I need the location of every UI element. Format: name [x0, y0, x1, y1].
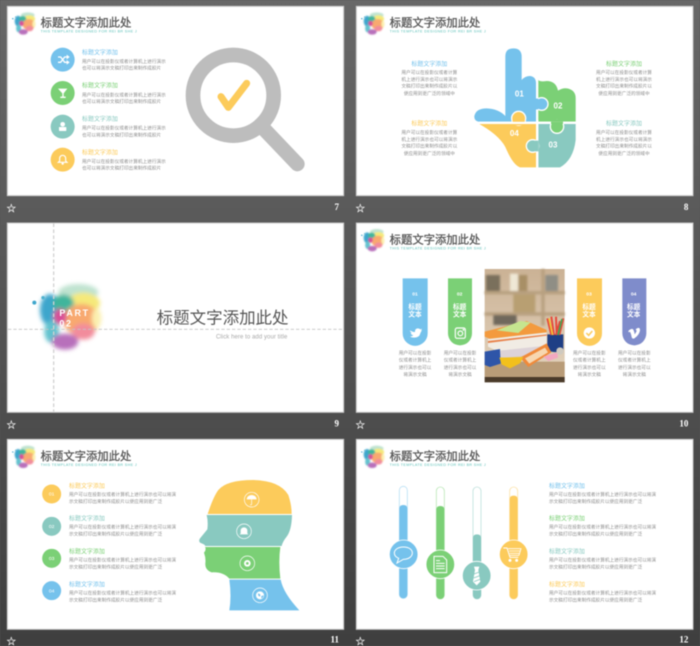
slide 8 logo	[361, 12, 385, 35]
text row 2: 标题文字添加	[549, 515, 585, 523]
tab 03: 03	[586, 291, 592, 297]
text block 4: 标题文字添加	[411, 120, 447, 128]
slide 12 logo	[361, 446, 385, 468]
text block 2: 便应用到更广泛的领域中	[598, 90, 650, 97]
slide 7 title: 标题文字添加此处	[41, 16, 131, 30]
tab 01: 将演示文稿	[403, 371, 427, 378]
page number 10: 10	[679, 418, 689, 428]
text block 2: 用户可以在投影仪或者计算	[596, 69, 652, 76]
page number 8: 8	[684, 202, 689, 212]
text block 3: 机上进行演示也可以将演示	[596, 136, 652, 143]
tab 01: 标题	[408, 302, 422, 311]
slider 4: cart	[499, 487, 528, 599]
item 4: 也可以将演示文稿打印出来制作成胶片	[82, 165, 162, 172]
item 2: 用户可以在投影仪或者计算机上进行演示	[82, 91, 166, 98]
tab 01: 文本	[408, 309, 422, 318]
item 1	[51, 48, 166, 72]
row 03: 示文稿打印出来制作成胶片以便应用到更广泛	[69, 563, 162, 570]
part label	[59, 308, 90, 329]
slider 1: speech	[389, 486, 418, 598]
text block 4: 文稿打印出来制作成胶片以	[401, 143, 458, 150]
slide 11 subtitle: THIS TEMPLATE DESIGNED FOR REI BR SHE J	[41, 463, 137, 467]
item 2: 也可以将演示文稿打印出来制作成胶片	[82, 98, 162, 105]
tab 01: 进行演示也可以	[399, 364, 432, 371]
slide 9 star mark: ☆	[7, 420, 16, 430]
tab 04: 文本	[627, 309, 641, 318]
text row 1: 示文稿打印出来制作成胶片以便应用到更广泛	[549, 498, 642, 505]
slide 10 logo	[361, 229, 385, 251]
slide 11 title: 标题文字添加此处	[41, 449, 131, 463]
tab 01	[399, 278, 432, 378]
row 01	[42, 482, 176, 505]
text row 3: 标题文字添加	[549, 547, 585, 555]
row 04: 示文稿打印出来制作成胶片以便应用到更广泛	[69, 596, 162, 603]
text row 4: 标题文字添加	[549, 580, 585, 588]
row 03	[42, 547, 176, 570]
slide 8 sheet	[356, 6, 693, 196]
page number 9: 9	[334, 418, 339, 428]
puzzle hand chart: 03	[549, 140, 558, 149]
text block 1: 文稿打印出来制作成胶片以	[401, 83, 458, 90]
slide 11 logo	[12, 446, 36, 468]
slide 10 subtitle: THIS TEMPLATE DESIGNED FOR REI BR SHE J	[390, 246, 486, 250]
row 03: 03	[49, 556, 55, 562]
slide 7 logo	[12, 12, 36, 35]
page number 12: 12	[679, 635, 689, 645]
tab 04	[618, 278, 651, 378]
slider 3: tie	[462, 487, 491, 599]
panel: slide 12 sliders	[356, 439, 693, 646]
text block 1: 机上进行演示也可以将演示	[401, 76, 458, 83]
row 02	[42, 515, 176, 538]
slide 7 subtitle: THIS TEMPLATE DESIGNED FOR REI BR SHE J	[41, 30, 137, 34]
tab 01: 仪或者计算机上	[399, 357, 432, 364]
page number 7: 7	[334, 202, 339, 212]
slide 8 star mark: ☆	[356, 203, 365, 213]
text row 4	[549, 580, 656, 603]
tab 04: 04	[631, 291, 637, 297]
tab 03: 将演示文稿	[578, 371, 601, 378]
text row 1: 用户可以在投影仪或者计算机上进行演示也可以将演	[549, 491, 656, 498]
row 04: 04	[49, 588, 55, 594]
row 03: 标题文字添加	[69, 547, 105, 555]
row 02: 02	[49, 524, 55, 530]
slide 7 sheet	[7, 6, 344, 196]
item 2	[51, 81, 166, 105]
tab 04: 用户可以在投影	[618, 350, 651, 357]
tab 02: 将演示文稿	[448, 371, 472, 378]
part label: PART	[59, 308, 90, 318]
item 1: 也可以将演示文稿打印出来制作成胶片	[82, 65, 162, 72]
head silhouette chart	[199, 480, 299, 610]
photo: books and pencils	[485, 269, 565, 382]
slider 2: document	[426, 487, 455, 599]
tab 02: 进行演示也可以	[444, 364, 477, 371]
slide 10 sheet	[356, 223, 693, 412]
puzzle hand chart	[474, 48, 576, 167]
text block 4: 便应用到更广泛的领域中	[404, 150, 455, 157]
puzzle hand chart: 02	[554, 101, 563, 110]
text block 2: 文稿打印出来制作成胶片以	[596, 83, 652, 90]
part label: 02	[59, 319, 73, 329]
text block 3	[596, 120, 652, 157]
row 01: 示文稿打印出来制作成胶片以便应用到更广泛	[69, 498, 162, 505]
tab 02: 仪或者计算机上	[444, 357, 477, 364]
row 03: 用户可以在投影仪或者计算机上进行演示也可以将演	[69, 556, 176, 563]
slide 10 title: 标题文字添加此处	[390, 232, 480, 246]
tab 02	[444, 278, 477, 378]
text block 1: 便应用到更广泛的领域中	[404, 90, 455, 97]
panel: slide 8 puzzle hand	[356, 6, 693, 213]
text block 3: 用户可以在投影仪或者计算	[596, 129, 652, 136]
text block 4: 机上进行演示也可以将演示	[401, 136, 458, 143]
slide 11 sheet	[7, 439, 344, 629]
tab 02: 文本	[453, 309, 467, 318]
item 3: 用户可以在投影仪或者计算机上进行演示	[82, 125, 166, 132]
tab 04: 进行演示也可以	[618, 364, 651, 371]
slide 12 subtitle: THIS TEMPLATE DESIGNED FOR REI BR SHE J	[390, 463, 486, 467]
text row 1	[549, 482, 656, 505]
item 3: 也可以将演示文稿打印出来制作成胶片	[82, 131, 162, 138]
tab 03	[573, 278, 606, 378]
slide 12 sheet	[356, 439, 693, 629]
text row 1: 标题文字添加	[549, 482, 585, 490]
panel: slide 10 tabs and photo	[356, 223, 693, 430]
slide 8 subtitle: THIS TEMPLATE DESIGNED FOR REI BR SHE J	[390, 30, 486, 34]
item 1: 标题文字添加	[82, 48, 118, 56]
text block 3: 文稿打印出来制作成胶片以	[596, 143, 652, 150]
item 4: 用户可以在投影仪或者计算机上进行演示	[82, 158, 166, 165]
slide 7 star mark: ☆	[7, 203, 16, 213]
row 02: 标题文字添加	[69, 515, 105, 523]
text block 1: 用户可以在投影仪或者计算	[401, 69, 458, 76]
tab 01: 01	[412, 291, 418, 297]
text block 3: 标题文字添加	[606, 120, 642, 128]
text row 4: 用户可以在投影仪或者计算机上进行演示也可以将演	[549, 589, 656, 596]
row 01: 用户可以在投影仪或者计算机上进行演示也可以将演	[69, 491, 176, 498]
section title: 标题文字添加此处	[157, 308, 289, 327]
puzzle hand chart: 01	[515, 89, 524, 98]
tab 02: 标题	[453, 302, 467, 311]
panel: slide 11 head diagram	[7, 439, 344, 646]
text row 3: 用户可以在投影仪或者计算机上进行演示也可以将演	[549, 556, 656, 563]
tab 01: 用户可以在投影	[399, 350, 432, 357]
text row 3: 示文稿打印出来制作成胶片以便应用到更广泛	[549, 563, 642, 570]
item 4	[51, 148, 166, 172]
text block 1: 标题文字添加	[411, 60, 447, 68]
item 2: 标题文字添加	[82, 82, 118, 90]
tab 03: 标题	[582, 302, 596, 311]
slide 12 title: 标题文字添加此处	[390, 449, 480, 463]
row 01: 标题文字添加	[69, 482, 105, 490]
tab 03: 进行演示也可以	[573, 364, 606, 371]
text block 2: 机上进行演示也可以将演示	[596, 76, 652, 83]
watercolor splash	[32, 284, 101, 350]
row 04: 用户可以在投影仪或者计算机上进行演示也可以将演	[69, 589, 176, 596]
text row 2: 示文稿打印出来制作成胶片以便应用到更广泛	[549, 531, 642, 538]
item 3: 标题文字添加	[82, 115, 118, 123]
text row 3	[549, 547, 656, 570]
row 02: 用户可以在投影仪或者计算机上进行演示也可以将演	[69, 524, 176, 531]
slide 9 sheet	[7, 223, 344, 412]
tab 04: 将演示文稿	[623, 371, 646, 378]
text block 4	[401, 120, 458, 157]
text block 3: 便应用到更广泛的领域中	[598, 150, 650, 157]
tab 02: 02	[457, 291, 463, 297]
item 4: 标题文字添加	[82, 148, 118, 156]
section subtitle: Click here to add your title	[216, 335, 288, 341]
text block 4: 用户可以在投影仪或者计算	[401, 129, 458, 136]
text row 2	[549, 515, 656, 538]
text block 2: 标题文字添加	[606, 60, 642, 68]
row 04: 标题文字添加	[69, 580, 105, 588]
row 02: 示文稿打印出来制作成胶片以便应用到更广泛	[69, 531, 162, 538]
text row 4: 示文稿打印出来制作成胶片以便应用到更广泛	[549, 596, 642, 603]
item 1: 用户可以在投影仪或者计算机上进行演示	[82, 58, 166, 65]
text block 2	[596, 60, 652, 97]
page number 11: 11	[330, 635, 339, 645]
panel: slide 7 magnifier	[7, 6, 344, 213]
tab 04: 标题	[627, 302, 641, 311]
panel: slide 9 section title	[7, 223, 344, 430]
tab 04: 仪或者计算机上	[618, 357, 651, 364]
row 04	[42, 580, 176, 603]
tab 03: 文本	[582, 309, 596, 318]
item 3	[51, 115, 166, 139]
text block 1	[401, 60, 458, 97]
tab 03: 仪或者计算机上	[573, 357, 606, 364]
tab 02: 用户可以在投影	[444, 350, 477, 357]
row 01: 01	[49, 492, 55, 498]
puzzle hand chart: 04	[510, 129, 519, 138]
tab 03: 用户可以在投影	[573, 350, 606, 357]
slide 8 title: 标题文字添加此处	[390, 16, 480, 30]
magnifier icon	[193, 55, 297, 164]
slide 10 star mark: ☆	[356, 420, 365, 430]
text row 2: 用户可以在投影仪或者计算机上进行演示也可以将演	[549, 524, 656, 531]
